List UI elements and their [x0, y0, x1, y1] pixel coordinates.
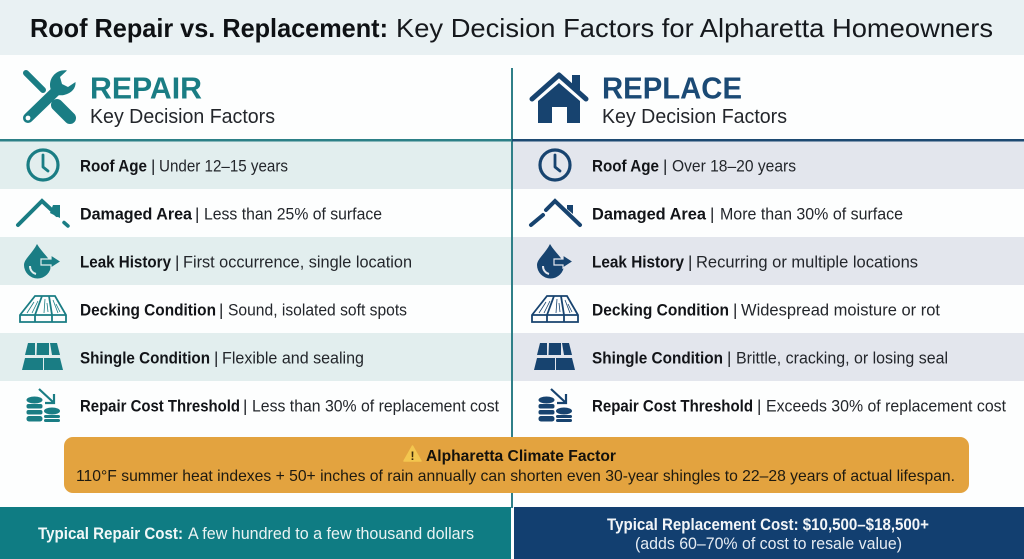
callout: Alpharetta climate factor: Alpharetta Climate Factor [426, 448, 616, 465]
row: replace roof age: Roof Age [592, 156, 659, 176]
row: replace cost threshold: Repair Cost Threshold [592, 396, 753, 416]
row: replace shingle condition [513, 333, 1024, 381]
row: repair cost threshold: Repair Cost Threshold [80, 396, 240, 416]
footer: typical repair cost: Typical Repair Cost: [38, 525, 183, 543]
row: replace damaged area: | [710, 204, 714, 224]
row: repair damaged area: Less than 25% of surface [204, 204, 382, 224]
row: repair damaged area: | [195, 204, 199, 224]
row: replace roof age [513, 142, 1024, 189]
panel: replace [513, 70, 1024, 422]
footer: typical replacement cost: (adds 60–70% of cost to resale value) [635, 535, 902, 553]
row: replace leak history: Leak History [592, 252, 684, 272]
row: repair leak history: First occurrence, single location [183, 252, 412, 272]
title banner [0, 0, 1024, 55]
row: repair roof age [0, 142, 511, 189]
row: repair cost threshold: Less than 30% of replacement cost [252, 396, 499, 416]
row: replace leak history [513, 237, 1024, 285]
row: replace decking condition [532, 296, 940, 322]
callout: Alpharetta climate factor [64, 437, 969, 493]
row: repair shingle condition: | [214, 348, 218, 368]
row: replace cost threshold [538, 389, 1006, 422]
row: replace decking condition: Widespread moisture or rot [741, 300, 940, 320]
repair heading: REPAIR [90, 70, 202, 106]
row: repair leak history: | [175, 252, 179, 272]
row: replace leak history: | [688, 252, 692, 272]
callout: Alpharetta climate factor: 110°F summer heat indexes + 50+ inches of rain annually can shorten even 30-year shingles to 22–28 years of actual lifespan. [76, 468, 955, 485]
row: replace damaged area [531, 201, 903, 225]
row: repair cost threshold: | [243, 396, 247, 416]
replace heading: Key Decision Factors [602, 106, 787, 128]
row: repair roof age: | [151, 156, 155, 176]
repair heading: Key Decision Factors [90, 106, 275, 128]
row: repair roof age: Roof Age [80, 156, 147, 176]
row: replace decking condition: Decking Condition [592, 300, 729, 320]
row: repair shingle condition: Shingle Condition [80, 348, 210, 368]
repair heading [90, 70, 275, 128]
row: repair shingle condition [0, 333, 511, 381]
icon: wrench and screwdriver [26, 70, 76, 120]
icon: warning triangle [404, 446, 421, 463]
row: replace decking condition: | [733, 300, 737, 320]
footer: typical repair cost [0, 507, 511, 559]
footer: typical replacement cost [514, 507, 1024, 559]
panel: repair [0, 70, 511, 422]
row: repair decking condition: Sound, isolated soft spots [228, 300, 407, 320]
row: replace cost threshold: | [757, 396, 761, 416]
row: replace roof age: Over 18–20 years [672, 156, 796, 176]
replace heading: REPLACE [602, 70, 742, 106]
title banner: Roof Repair vs. Replacement: [30, 13, 388, 43]
row: repair damaged area: Damaged Area [80, 204, 193, 224]
row: replace shingle condition: Brittle, cracking, or losing seal [736, 348, 948, 368]
row: repair leak history: Leak History [80, 252, 171, 272]
row: replace shingle condition: | [727, 348, 731, 368]
row: replace leak history: Recurring or multiple locations [696, 252, 918, 272]
row: repair decking condition [20, 296, 407, 322]
footer: typical repair cost: A few hundred to a few thousand dollars [188, 525, 474, 543]
row: replace shingle condition: Shingle Condition [592, 348, 723, 368]
row: repair decking condition: | [219, 300, 223, 320]
icon: house [532, 75, 586, 123]
row: repair cost threshold [26, 389, 499, 422]
row: repair damaged area [18, 201, 382, 226]
footer: typical replacement cost: Typical Replacement Cost: $10,500–$18,500+ [607, 516, 929, 534]
row: replace damaged area: More than 30% of surface [720, 204, 903, 224]
row: replace roof age: | [663, 156, 667, 176]
row: repair shingle condition: Flexible and sealing [222, 348, 364, 368]
icon: warning triangle: ! [410, 449, 414, 463]
row: repair roof age: Under 12–15 years [159, 156, 288, 176]
title banner: Key Decision Factors for Alpharetta Homeowners [396, 13, 993, 43]
row: replace damaged area: Damaged Area [592, 204, 707, 224]
row: repair decking condition: Decking Condition [80, 300, 216, 320]
row: replace cost threshold: Exceeds 30% of replacement cost [766, 396, 1006, 416]
row: repair leak history [0, 237, 511, 285]
replace heading [602, 70, 787, 128]
